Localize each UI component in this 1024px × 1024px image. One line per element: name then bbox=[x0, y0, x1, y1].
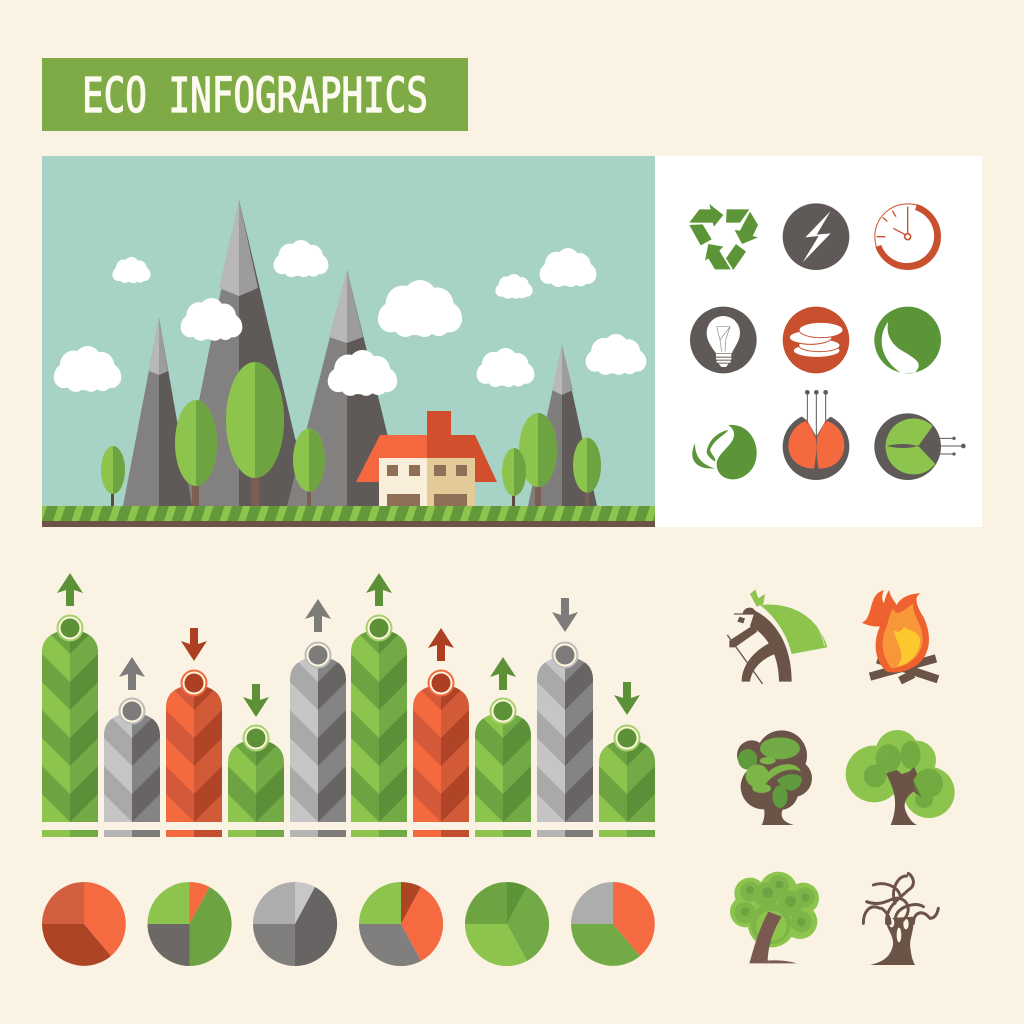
pie 1 bbox=[42, 882, 126, 966]
panel: landscape scene bbox=[42, 156, 655, 527]
icon: butterfly bbox=[783, 390, 849, 480]
bar 9 bbox=[537, 598, 593, 837]
icon: gauge bbox=[875, 204, 940, 269]
bar 8 bbox=[475, 657, 531, 837]
mountain: left bbox=[123, 318, 192, 506]
panel: icon grid bbox=[655, 156, 982, 527]
bar 2 bbox=[104, 657, 160, 837]
bar 4 bbox=[228, 684, 284, 837]
house bbox=[356, 411, 497, 506]
bar 3 bbox=[166, 628, 222, 837]
bar chart bbox=[42, 573, 655, 837]
icon: recycle bbox=[689, 204, 758, 270]
icon: hiker bbox=[727, 589, 827, 684]
icon: round green tree bbox=[730, 872, 819, 963]
mountain: small far right bbox=[528, 345, 597, 506]
bar 7 bbox=[413, 628, 469, 837]
pie 4 bbox=[359, 882, 443, 966]
pie charts bbox=[42, 882, 655, 966]
pie 6 bbox=[571, 882, 655, 966]
ground strip bbox=[42, 506, 655, 527]
icon: light bulb bbox=[690, 307, 757, 373]
icon: coins bbox=[783, 307, 849, 373]
icon: campfire bbox=[862, 590, 938, 681]
bar 5 bbox=[290, 599, 346, 837]
icon set: hiker, fire and trees bbox=[727, 589, 955, 965]
mountain: tallest bbox=[178, 200, 318, 506]
clouds bbox=[54, 240, 646, 396]
bar 10 bbox=[599, 682, 655, 837]
pie 2 bbox=[148, 882, 232, 966]
icon: green segmented circle bbox=[874, 413, 966, 480]
icon: leaf circle bbox=[874, 307, 941, 373]
icon: translucent tree bbox=[846, 730, 955, 825]
icon: lightning bbox=[783, 203, 849, 270]
icon: brown leafy tree bbox=[737, 730, 812, 825]
bar 1 bbox=[42, 573, 98, 837]
icon: sprouting leaf bbox=[692, 425, 757, 479]
title banner: ECO INFOGRAPHICS bbox=[82, 68, 428, 124]
mountain: centre bbox=[287, 270, 405, 506]
title banner bbox=[42, 58, 468, 131]
trees bbox=[101, 362, 601, 506]
pie 5 bbox=[465, 882, 549, 966]
bar 6 bbox=[351, 573, 407, 837]
pie 3 bbox=[253, 882, 337, 966]
icon: bare tree bbox=[863, 873, 938, 965]
